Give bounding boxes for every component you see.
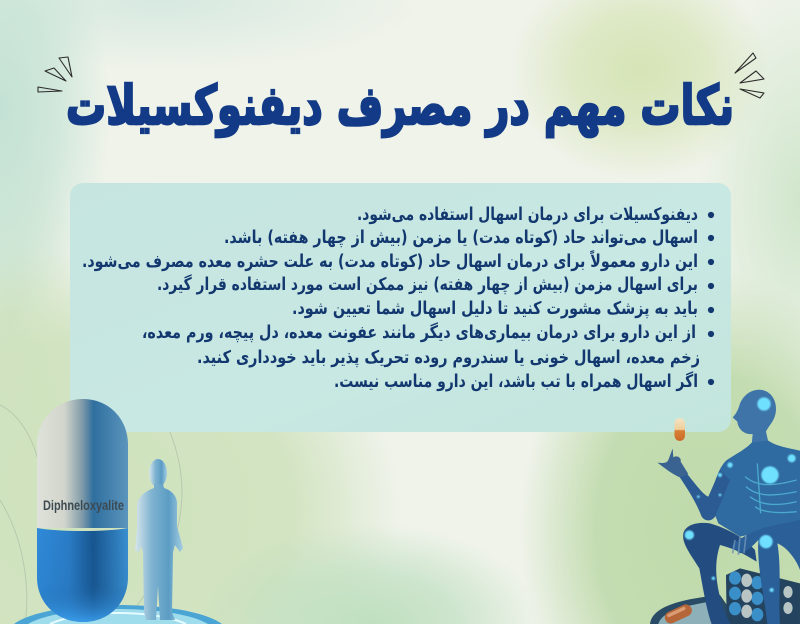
- illustration: capsule: [37, 399, 128, 622]
- capsule label: Diphneloxyalite: [43, 498, 124, 513]
- head and neck: [733, 390, 776, 445]
- tray: [650, 595, 740, 624]
- torso: [708, 441, 800, 537]
- illustration: seated glowing man: [650, 390, 800, 624]
- bullet list: زخم معده، اسهال خونی یا سندروم روده تحریک پذیر باید خودداری کنید.: [197, 348, 700, 368]
- pill on tray: [663, 602, 694, 624]
- icon: right sparkle rays: [735, 53, 764, 98]
- panel: key points: [70, 183, 731, 432]
- front leg: [683, 523, 757, 624]
- raised arm: [679, 470, 730, 520]
- illustration: glowing platform: [14, 605, 222, 624]
- faint background branches: [0, 405, 182, 624]
- bullet list: اگر اسهال همراه با تب باشد، این دارو مناسب نیست.: [334, 371, 698, 392]
- bullet list: دیفنوکسیلات برای درمان اسهال استفاده می‌شود.: [357, 205, 698, 225]
- glowing nodes: [685, 397, 796, 592]
- bullet list: باید به پزشک مشورت کنید تا دلیل اسهال شما تعیین شود.: [292, 299, 698, 319]
- bullet list: اسهال می‌تواند حاد (کوتاه مدت) یا مزمن (بیش از چهار هفته) باشد.: [224, 228, 698, 248]
- hand: [657, 448, 688, 477]
- back leg: [732, 520, 800, 624]
- bullet list: [82, 205, 714, 392]
- illustration: floating pill: [674, 418, 685, 441]
- pill stack: [726, 568, 800, 624]
- resting hand: [733, 535, 746, 555]
- icon: left sparkle rays: [38, 57, 72, 92]
- ribs: [745, 463, 797, 513]
- illustration: standing figure: [135, 459, 183, 620]
